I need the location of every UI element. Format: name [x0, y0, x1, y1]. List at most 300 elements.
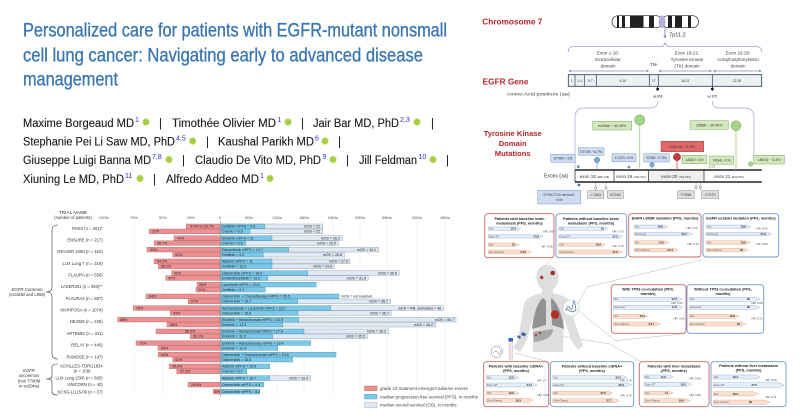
trial: ACHILLES-TORG1834: [60, 364, 270, 374]
trial: ACHILLES-TORG1834: Afatinib mPFS = 10.6: [222, 365, 256, 369]
author list: |: [206, 136, 209, 148]
mutation: E709-T710 del insD: [538, 184, 581, 204]
panel: with TP53 co-mutation: Ami+Laz: [614, 305, 626, 309]
EGFR gene bar: 8-16: [620, 79, 626, 83]
panel: no brain metastasis: 16.9: [596, 243, 601, 247]
trial: LUX Lung 7: Afatinib mPFS = 11: [222, 260, 253, 264]
panel: with baseline ctDNA: Patients with baseline ctDNA+: [489, 364, 544, 368]
author list: |: [301, 118, 304, 130]
trial: RELAY: RELAY (n = 449): [71, 343, 103, 348]
panel: ex19del mutation: Osi: [707, 225, 712, 229]
panel: without liver metastasis: Osi: [714, 392, 719, 396]
icon: lung tissue magnifier: [563, 300, 579, 316]
trial: ENSURE: ENSURE (n = 217): [67, 238, 103, 243]
panel: without TP53 co-mutation: 23: [737, 322, 740, 326]
chart axis header: 36Mo: [382, 215, 393, 220]
domain labels: (TK) domain: [674, 64, 700, 68]
trial: ACHILLES-TORG1834: (n = 109): [74, 369, 91, 374]
mutation: G719X: G719X ~6-7%: [580, 150, 602, 154]
domain labels: domain: [730, 64, 746, 68]
mutation: E709X: [551, 154, 580, 168]
group label: EGFR uncommon: uncommon: [19, 373, 40, 378]
panel: with liver metastasis: (PFS, months): [661, 369, 688, 373]
panel: without liver metastasis: Osi: [714, 375, 719, 379]
panel: without liver metastasis: Dato-DT: [714, 383, 725, 387]
trial: LASER301: Lazertinib mPFS = 20.6: [222, 283, 260, 287]
panel: without liver metastasis: Osi+Chemo: [714, 400, 729, 404]
mutation: ex19del: [593, 115, 645, 170]
trial: ARCHER 1050: Gefitinib = 9.2: [222, 253, 244, 257]
panel: with baseline ctDNA: Osi: [487, 376, 492, 380]
author list: 9: [322, 154, 326, 161]
EGFR gene bar: 17: [652, 79, 656, 83]
trial: ARCHER 1050: ARCHER 1050 (n = 452): [56, 249, 103, 254]
trial: KCSG-LU15-09: KCSG-LU15-09 (n = 37): [58, 389, 103, 394]
trial: KCSG-LU15-09: 6%: [214, 390, 220, 394]
group label: EGFR common: [9, 225, 58, 359]
label: tyrosine kinase domain mutations: Mutations: [495, 149, 531, 158]
panel: without baseline ctDNA: HR: 0.76: [620, 378, 632, 382]
group label: EGFR uncommon: [18, 364, 58, 395]
trial: NEJ026: Erlotinib + Bevacizumab mPFS = 16.9: [222, 318, 283, 322]
chart axis header: 24Mo: [328, 215, 339, 220]
mutation: E709-T710 del insD: <1%: [555, 198, 563, 202]
chart axis header: (number of patients): [54, 215, 92, 220]
panel: with liver metastasis: 18.4: [679, 398, 684, 402]
panel: baseline brain metastasis: metastasis (PFS, months): [496, 222, 543, 226]
panel: ex19del mutation: HR: 0.65: [756, 226, 768, 230]
trial: MARIPOSA: MARIPOSA (n = 1074): [60, 308, 103, 313]
trial: FLAURA2: FLAURA2 (n = 557): [66, 296, 103, 301]
chart legend: [364, 386, 479, 408]
panel: no brain metastasis: 27.5: [613, 234, 618, 238]
trial: ENSURE: Erlotinib mPFS = 11: [222, 236, 254, 240]
panel: ex19del mutation: 18: [740, 248, 743, 252]
trial: LASER301: [61, 282, 316, 292]
mutation: L718Q: [588, 183, 604, 198]
chromosome ideogram: [612, 16, 698, 28]
panel: baseline brain metastasis: Dato-DT: [489, 234, 500, 238]
trial: RAMOSE: 41%: [175, 358, 183, 362]
panel: with baseline ctDNA: 24.4: [527, 383, 532, 387]
trial: LUX Lung 7: Gefitinib = 10.9: [222, 265, 246, 269]
trial: NEJ026: NEJ026 (n = 228): [70, 319, 103, 324]
mutation: L747X: L747X <1%: [615, 156, 633, 160]
EGFR gene bar: 18-21: [681, 79, 690, 83]
panel: with liver metastasis: 18.2: [681, 382, 686, 386]
panel: without baseline ctDNA: Osi: [554, 391, 558, 395]
panel: baseline brain metastasis: 13: [512, 243, 515, 247]
label: amino-acid positions: Amino-Acid positions (aa): [507, 91, 570, 97]
mutation: L833V: [682, 155, 711, 168]
panel: without baseline ctDNA: Patients without baseline ctDNA+: [562, 364, 623, 368]
mutation: E709-T710 del insD: E709-T710 del insD: [544, 193, 575, 197]
group label: EGFR common: EGFR Common: [11, 287, 43, 292]
exon track: exon 21 (824-875): [714, 174, 744, 179]
trial: UNICORN: [67, 382, 264, 387]
panel: with liver metastasis: Osi+Chemo: [645, 398, 660, 402]
trial: LUX Lung 7: [63, 259, 350, 269]
panel: no brain metastasis: HR: 0.75: [612, 244, 624, 248]
panel: no brain metastasis: Osi: [560, 227, 564, 231]
panel: with liver metastasis: Dato-DT: [645, 382, 656, 386]
trial: NEJ026: mOS = 46.2: [414, 323, 433, 327]
panel: without TP53 co-mutation: 26: [747, 305, 750, 309]
panel: without TP53 co-mutation: months): [716, 292, 731, 296]
mutation: ex19del: ex19del ~ 40-45%: [598, 124, 626, 128]
panel: with liver metastasis: [639, 362, 709, 407]
trial: MARIPOSA: Amivantamab + Lazertinib mPFS = 23.7: [222, 306, 286, 310]
chart legend: grade ≥3 treatment emergent adverse events: [380, 386, 469, 391]
trial: ARCHER 1050: mOS = 26.8: [323, 253, 342, 257]
author list: |: [153, 174, 156, 186]
trial: FLAURA2: [66, 294, 391, 304]
trial: ACHILLES-TORG1834: 45.9%: [172, 365, 183, 369]
trial: FLAURA: mOS = 38.6: [378, 271, 397, 275]
panel: without liver metastasis: [711, 362, 786, 407]
trial: RAMOSE: Osimertinib = 15.6: [222, 358, 251, 362]
trial: FLAURA: [68, 271, 399, 280]
trial: PASS: mOS = 22: [304, 230, 320, 234]
panel: with liver metastasis: HR: 0.59: [689, 393, 701, 397]
panel: L858R mutation: HR: 0.72: [686, 226, 698, 230]
trial: ENSURE: mOS = 25.5: [317, 241, 336, 245]
trial: FLAURA: 40%: [174, 271, 182, 275]
author list: 4,5: [176, 136, 186, 142]
trial: NEJ026: Erlotinib = 13.3: [222, 323, 246, 327]
mutation: C797S: C797S: [705, 193, 716, 197]
icon: blood draw: [508, 332, 526, 360]
trial: LASER301: Gefitinib = 9.7: [222, 288, 244, 292]
author list: |: [338, 136, 341, 148]
trial: FLAURA2: 27%: [191, 300, 199, 304]
arrow: 7p11.2 locus: 7p11.2: [669, 32, 686, 38]
group label: EGFR uncommon: or ex20ins): [19, 384, 40, 388]
kinase domain bracket: [575, 101, 754, 170]
panel: without liver metastasis: HR: 0.69: [765, 378, 777, 382]
panel: L858R mutation: 16.8: [658, 225, 663, 229]
panel: without TP53 co-mutation: HR: 0.71: [751, 316, 763, 320]
panel: with baseline ctDNA: [484, 362, 549, 407]
panel: no brain metastasis: Osi+Chemo: [560, 250, 575, 254]
author list: Alfredo Addeo MD: [166, 174, 259, 186]
trial: FLAURA2: 64%: [149, 295, 157, 299]
panel: with baseline ctDNA: HR: 0.69: [537, 393, 549, 397]
mutation: V834L: V834L <1%: [713, 158, 731, 162]
trial: ENSURE: Chemo = 5.5: [222, 241, 243, 245]
author list: |: [431, 118, 434, 130]
panel: no brain metastasis: 27.6: [613, 250, 618, 254]
trial: ARTEMIS: mOS = 35.5: [346, 335, 365, 339]
mutation: L858R: [690, 121, 741, 170]
author list: Timothée Olivier MD: [172, 118, 276, 130]
trial: MARIPOSA: [60, 306, 443, 315]
panel: with TP53 co-mutation: 17.6: [672, 297, 677, 301]
panel: with liver metastasis: Patients with liver metastasis: [648, 364, 700, 368]
trial: MARIPOSA: Osimertinib = 16.6: [222, 311, 251, 315]
trial: RELAY: Erlotinib = 12.4: [222, 346, 246, 350]
mutation: G719X: [578, 148, 604, 170]
trial: ARTEMIS: mOS = 36.2: [367, 330, 386, 334]
group label: EGFR uncommon: (non T790M: [18, 378, 41, 384]
trial: RAMOSE: RAMOSE (n = 147): [66, 354, 103, 359]
label: amino-acid positions: aa 668: [653, 94, 663, 98]
trial: RELAY: 54%: [161, 346, 169, 350]
panel: ex19del mutation: Osi+Chemo: [707, 248, 722, 252]
author list: 11: [125, 173, 132, 180]
panel: L858R mutation: [629, 214, 701, 257]
panel: without baseline ctDNA: 30.3: [616, 376, 621, 380]
EGFR gene bar: 22-28: [733, 79, 741, 83]
author list: Jair Bar MD, PhD: [313, 118, 399, 130]
author list: 1: [278, 117, 282, 124]
author list: Maxime Borgeaud MD: [23, 118, 134, 130]
trial: ACHILLES-TORG1834: ACHILLES-TORG1834: [60, 364, 103, 369]
panel: without TP53 co-mutation: 19.9: [730, 314, 735, 318]
trial: NEJ026: [70, 317, 456, 327]
panel: with liver metastasis: Osi: [645, 391, 650, 395]
trial: PASS: 5.4% vs 28.7%: [190, 225, 215, 229]
panel: without baseline ctDNA: Dato-DT: [554, 383, 564, 387]
chart legend: median progression-free survival (PFS), in months: [380, 394, 479, 399]
author list: 1: [260, 173, 264, 180]
mutation: S768I: S768I ~2-3%: [646, 156, 667, 160]
mutation: E709X: E709X <1%: [554, 157, 572, 161]
trial: ENSURE: [67, 236, 342, 245]
panel: with TP53 co-mutation: With TP53 co-mutation (PFS,: [622, 288, 674, 292]
chart axis header: TRIAL NAME: [59, 210, 87, 216]
trial: ARCHER 1050: mOS = 34.1: [357, 248, 376, 252]
human body illustration: [513, 265, 583, 352]
trial: KCSG-LU15-09: [58, 389, 260, 394]
chart axis header: 50%: [159, 215, 167, 220]
chart axis header: 25%: [187, 215, 195, 220]
icon: ctDNA circle: [491, 346, 502, 357]
exon track: Exons (aa): [544, 174, 569, 180]
label: amino-acid positions: [507, 86, 717, 98]
trial: ARTEMIS: Erlotinib = 11.2: [222, 335, 246, 339]
title: Personalized care for patients with EGFR-mutant nonsmall: [23, 20, 447, 42]
panel: ex19del mutation: 19.9: [741, 240, 746, 244]
trial: ACHILLES-TORG1834: Chemo = 5.7: [222, 370, 243, 374]
panel: L858R mutation: HR: 0.75: [687, 242, 699, 246]
trial: FLAURA: FLAURA (n = 556): [68, 273, 103, 278]
mutation: ex20 ins: [661, 141, 704, 170]
chart axis header: 0: [219, 215, 222, 220]
domain labels: domain: [600, 64, 616, 68]
trial: FLAURA2: Osimertinib = 16.7: [222, 300, 251, 304]
panel: ex19del mutation: 19.9: [741, 225, 746, 229]
panel: L858R mutation: Osi: [635, 225, 640, 229]
panel: without liver metastasis: (PFS, months): [736, 368, 762, 372]
panel: without liver metastasis: 28: [749, 400, 752, 404]
gene bracket: [568, 43, 762, 52]
panel: with TP53 co-mutation: 17.6: [672, 305, 677, 309]
trial: MARIPOSA: 75%: [136, 306, 144, 310]
trial: LASER301: 26%: [199, 283, 207, 287]
panel: with TP53 co-mutation: 16.4: [640, 314, 645, 318]
mutation: L861Q: [748, 155, 784, 166]
panel: without baseline ctDNA: 27.5: [601, 391, 606, 395]
chart axis header: 6Mo: [245, 215, 254, 220]
trial: KCSG-LU15-09: Osimertinib mPFS = 8.2: [222, 390, 260, 394]
trial: LUX Lung 2/3/6: mOS = 19.4: [289, 376, 308, 380]
panel: without TP53 co-mutation: Without TP53 co-mutation (PFS,: [694, 288, 752, 292]
title: management: [23, 68, 118, 90]
panel: baseline brain metastasis: Osi: [489, 227, 494, 231]
author list: Xiuning Le MD, PhD: [23, 174, 124, 186]
mutation: C797S: [699, 183, 719, 198]
trial: PASS: PASS (n = 261)*: [72, 226, 103, 231]
panel: with baseline ctDNA: Osi: [487, 391, 492, 395]
chart legend: median overall survival (OS), in months: [380, 403, 457, 408]
trial: PASS: 37%: [152, 230, 160, 234]
panel: without TP53 co-mutation: HR: 0.68: [751, 301, 763, 305]
author list: Claudio De Vito MD, PhD: [195, 155, 321, 167]
trial: ARTEMIS: ARTEMIS (n = 311): [66, 331, 103, 336]
panel: L858R mutation: Osi: [635, 240, 640, 244]
domain labels: Exon 18-21:: [675, 50, 699, 56]
panel: baseline brain metastasis: [485, 214, 555, 258]
panel: ex19del mutation: 27.9: [761, 232, 766, 236]
panel: with baseline ctDNA: HR: 0.7: [537, 378, 547, 382]
label: EGFR Gene: EGFR Gene: [483, 78, 529, 87]
panel: L858R mutation: 24.4: [668, 248, 673, 252]
group label: EGFR uncommon: EGFR: [23, 368, 35, 373]
trial: LASER301: 21%: [198, 288, 206, 292]
trial: LUX Lung 2/3/6: LUX Lung 2/3/6 (n = 600): [56, 375, 103, 380]
panel: with TP53 co-mutation: 24.1: [649, 322, 654, 326]
trial: MARIPOSA: mOS = 36.7: [370, 311, 389, 315]
trial: UNICORN: UNICORN (n = 40): [67, 382, 103, 387]
trial: LUX Lung 7: mOS = 27.9: [329, 260, 348, 264]
trial: ARTEMIS: 56.6%: [185, 330, 196, 334]
EGFR gene bar: 2-4: [577, 79, 582, 83]
panel: baseline brain metastasis: Patients with baseline brain: [494, 217, 545, 221]
panel: L858R mutation: 25.7: [682, 232, 687, 236]
panel: with baseline ctDNA: (PFS, months): [503, 369, 530, 373]
arrow: 7p11.2 locus: [663, 28, 686, 38]
panel: without TP53 co-mutation: Osi+Chemo: [690, 322, 705, 326]
chart axis header: 100%: [99, 215, 110, 220]
label: tyrosine kinase domain mutations: Tyrosine Kinase: [484, 129, 542, 138]
panel: ex19del mutation: Osi: [707, 240, 712, 244]
panel: without liver metastasis: 27.5: [752, 383, 757, 387]
panel: without TP53 co-mutation: Osi: [690, 314, 695, 318]
exon track: exon 19 (729-761): [616, 174, 646, 179]
label: Chromosome 7: Chromosome 7: [482, 18, 543, 27]
panel: with baseline ctDNA: Osi+Chemo: [487, 398, 502, 402]
panel: L858R mutation: Ami+Laz: [635, 232, 647, 236]
mutation: L718Q: L718Q: [590, 193, 601, 197]
panel: without TP53 co-mutation: [687, 285, 764, 333]
author list: 6: [315, 136, 319, 142]
panel: baseline brain metastasis: 15.3: [511, 227, 516, 231]
trial: LASER301: LASER301 (n = 393)**: [61, 284, 103, 289]
panel: L858R mutation: Osi+Chemo: [635, 248, 650, 252]
trial: NEJ026: 46%: [170, 323, 178, 327]
domain labels: Exon 1-16:: [597, 50, 619, 56]
trial: LUX Lung 7: 54.9%: [157, 260, 168, 264]
trial: UNICORN: 26.5%: [191, 383, 202, 387]
chart axis header: 30Mo: [355, 215, 366, 220]
panel: with TP53 co-mutation: Osi+Chemo: [614, 322, 629, 326]
mutation: ex20 ins: ex20 ins ~ 5-9%: [669, 145, 695, 149]
panel: no brain metastasis: Osi: [560, 243, 564, 247]
EGFR gene bar: 5-7: [588, 79, 593, 83]
trial: PASS: Chemo = 6.3: [222, 230, 243, 234]
title: [23, 20, 447, 91]
trial: ARTEMIS: [66, 329, 389, 339]
panel: ex19del mutation: HR: 0.60: [756, 242, 768, 246]
panel: with liver metastasis: HR: 0.69: [689, 376, 701, 380]
trial chart: [9, 210, 479, 408]
mutation: G724S: G724S: [610, 193, 621, 197]
trial: MARIPOSA: 43%: [173, 311, 181, 315]
mutation: L833V: L833V <1%: [686, 158, 704, 162]
trial: RELAY: 72%: [139, 341, 147, 345]
label: amino-acid positions: aa 875: [707, 94, 717, 98]
trial: LUX Lung 2/3/6: Afatinib mPFS = 10.7: [222, 376, 256, 380]
mutation: T790M: T790M: [681, 193, 692, 197]
trial: FLAURA: Osimertinib mPFS = 18.9: [222, 271, 262, 275]
panel: with baseline ctDNA: 13.6: [509, 391, 514, 395]
panel: baseline brain metastasis: Osi: [489, 243, 494, 247]
panel: without liver metastasis: 16.3: [733, 392, 738, 396]
trial: ARCHER 1050: 63%: [150, 248, 158, 252]
panel: without baseline ctDNA: [550, 362, 634, 407]
panel: without TP53 co-mutation: 26: [747, 297, 750, 301]
domain labels: Exon 22-28:: [726, 50, 750, 56]
author list: |: [346, 155, 349, 167]
panel: no brain metastasis: [556, 214, 627, 258]
panel: without TP53 co-mutation: Ami+Laz: [690, 305, 702, 309]
trial: FLAURA2: Osimertinib + Chemotherapy mPFS = 25.5: [222, 295, 290, 299]
panel: with TP53 co-mutation: months): [641, 292, 656, 296]
panel: with TP53 co-mutation: [611, 285, 686, 333]
author list: |: [159, 118, 162, 130]
panel: no brain metastasis: HR: 0.75: [612, 230, 624, 234]
trial: FLAURA2: mOS = 36.7: [369, 300, 388, 304]
chart axis header: 48Mo: [440, 215, 451, 220]
author list: |: [446, 155, 449, 167]
panel: without baseline ctDNA: Osi+Chemo: [554, 398, 569, 402]
panel: with TP53 co-mutation: Osi: [614, 314, 619, 318]
panel: with baseline ctDNA: 19.3: [516, 398, 521, 402]
trial: LUX Lung 7: 50.2%: [161, 265, 172, 269]
trial: FLAURA: 47%: [168, 276, 176, 280]
exon track: exon 18 (688-728): [580, 174, 609, 179]
panel: no brain metastasis: metastasis (PFS, months): [568, 222, 615, 226]
trial: ARTEMIS: 26.1%: [193, 335, 204, 339]
trial: PASS: Gefitinib mPFS = 9.5: [222, 225, 255, 229]
author list: Giuseppe Luigi Banna MD: [23, 155, 151, 167]
mutation: L858R: L858R ~ 35-40%: [696, 124, 722, 128]
chart axis header: 18Mo: [299, 215, 310, 220]
author list: 1: [135, 117, 139, 124]
panel: baseline brain metastasis: Osi+Chemo: [489, 250, 504, 254]
domain labels: Autophosphorylation: [717, 57, 759, 62]
trial: PASS: mOS = 22: [304, 225, 320, 229]
author list: Stephanie Pei Li Saw MD, PhD: [23, 136, 175, 148]
domain labels: TM-: [650, 62, 659, 67]
trial: ARCHER 1050: 41%: [175, 253, 183, 257]
author list: 2,3: [400, 117, 410, 124]
trial: LUX Lung 7: mOS = 24.5: [313, 265, 332, 269]
domain span arrows: [568, 70, 762, 72]
panel: no brain metastasis: Patients without baseline brain: [563, 217, 620, 221]
panel: ex19del mutation: Ami+Laz: [707, 232, 719, 236]
